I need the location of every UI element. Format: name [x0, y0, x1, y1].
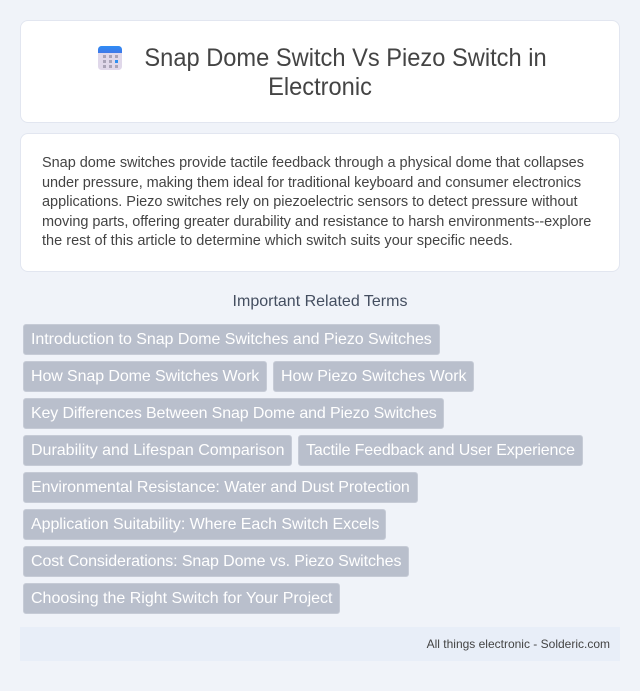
footer credit: All things electronic - Solderic.com: [427, 637, 610, 651]
tag: How Snap Dome Switches Work: [31, 368, 259, 385]
intro paragraph: moving parts, offering greater durability and resistance to harsh environments--explore: [42, 214, 591, 230]
tag: Environmental Resistance: Water and Dust Protection: [31, 479, 410, 496]
intro paragraph: Snap dome switches provide tactile feedback through a physical dome that collapses: [42, 155, 584, 171]
title: Electronic: [268, 73, 372, 101]
intro paragraph: applications. Piezo switches rely on piezoelectric sensors to detect pressure without: [42, 194, 578, 210]
tag: [23, 398, 444, 429]
tag: [23, 361, 267, 392]
tag: [273, 361, 474, 392]
panel: intro text card: [20, 133, 620, 272]
icon: calendar: [98, 46, 122, 70]
tag: [23, 509, 386, 540]
footer bar: [20, 627, 620, 661]
tag: Choosing the Right Switch for Your Project: [31, 590, 332, 607]
tag: [23, 583, 340, 614]
tag: [23, 472, 418, 503]
intro paragraph: the rest of this article to determine which switch suits your specific needs.: [42, 233, 513, 249]
intro paragraph: [42, 155, 591, 249]
tag: Durability and Lifespan Comparison: [31, 442, 284, 459]
tag: [23, 546, 409, 577]
tag: [23, 435, 292, 466]
tag: Application Suitability: Where Each Switch Excels: [31, 516, 379, 533]
heading: important related terms: Important Related Terms: [233, 293, 407, 310]
title: Snap Dome Switch Vs Piezo Switch in: [144, 44, 547, 72]
tag: Tactile Feedback and User Experience: [306, 442, 575, 459]
title: [144, 44, 547, 101]
tag: [298, 435, 583, 466]
tag: [23, 324, 440, 355]
tag: Key Differences Between Snap Dome and Piezo Switches: [31, 405, 437, 422]
panel: title card: [20, 20, 620, 123]
tag: Introduction to Snap Dome Switches and Piezo Switches: [31, 331, 432, 348]
intro paragraph: under pressure, making them ideal for traditional keyboard and consumer electronics: [42, 175, 581, 191]
tag: How Piezo Switches Work: [281, 368, 467, 385]
tag: Cost Considerations: Snap Dome vs. Piezo Switches: [31, 553, 401, 570]
